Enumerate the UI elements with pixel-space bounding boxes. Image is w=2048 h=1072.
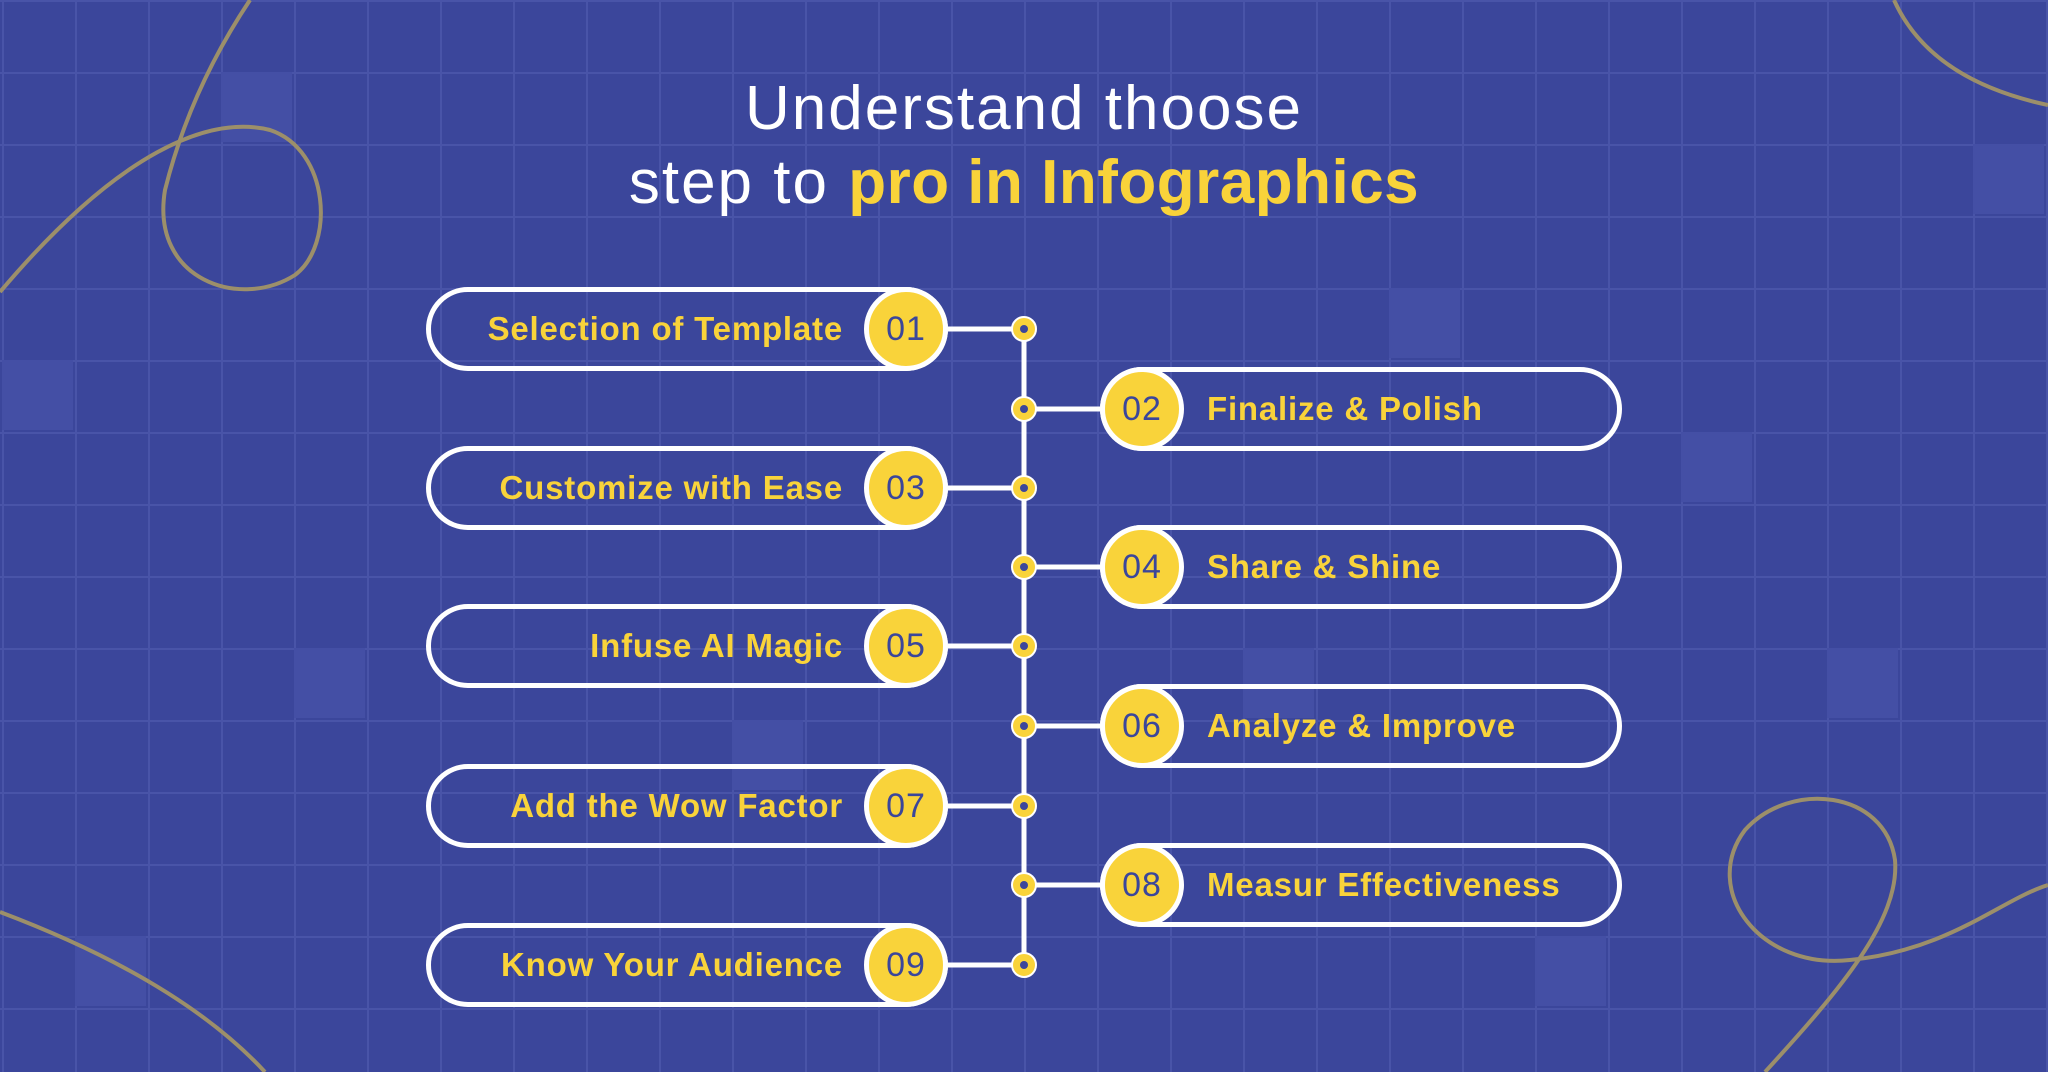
step 07: Add the Wow Factor	[510, 787, 843, 824]
step 05: Infuse AI Magic	[590, 627, 843, 664]
step 06: 06	[1122, 706, 1162, 744]
step 01: 01	[886, 310, 926, 348]
step 06	[1100, 684, 1622, 768]
step 07: 07	[886, 786, 926, 824]
step 03: Customize with Ease	[500, 469, 843, 506]
step 04	[1100, 525, 1622, 609]
step 02: Finalize & Polish	[1207, 390, 1483, 427]
step 06: Analyze & Improve	[1207, 707, 1516, 744]
step 08	[1100, 843, 1622, 927]
title: Understand thoose	[745, 74, 1303, 143]
step 01: Selection of Template	[488, 310, 843, 347]
step 02	[1100, 367, 1622, 451]
step 03: 03	[886, 468, 926, 506]
step 05: 05	[886, 626, 926, 664]
title	[629, 74, 1419, 217]
step 02: 02	[1122, 390, 1162, 428]
step 09: 09	[886, 946, 926, 984]
step 07	[426, 764, 948, 848]
step 09: Know Your Audience	[501, 946, 843, 983]
step 04: 04	[1122, 548, 1162, 586]
step 05	[426, 604, 948, 688]
step 08: 08	[1122, 866, 1162, 904]
title: step to pro in Infographics	[629, 148, 1419, 217]
step 04: Share & Shine	[1207, 548, 1441, 585]
step 09	[426, 923, 948, 1007]
step 01	[426, 287, 948, 371]
step 03	[426, 446, 948, 530]
step 08: Measur Effectiveness	[1207, 866, 1560, 903]
